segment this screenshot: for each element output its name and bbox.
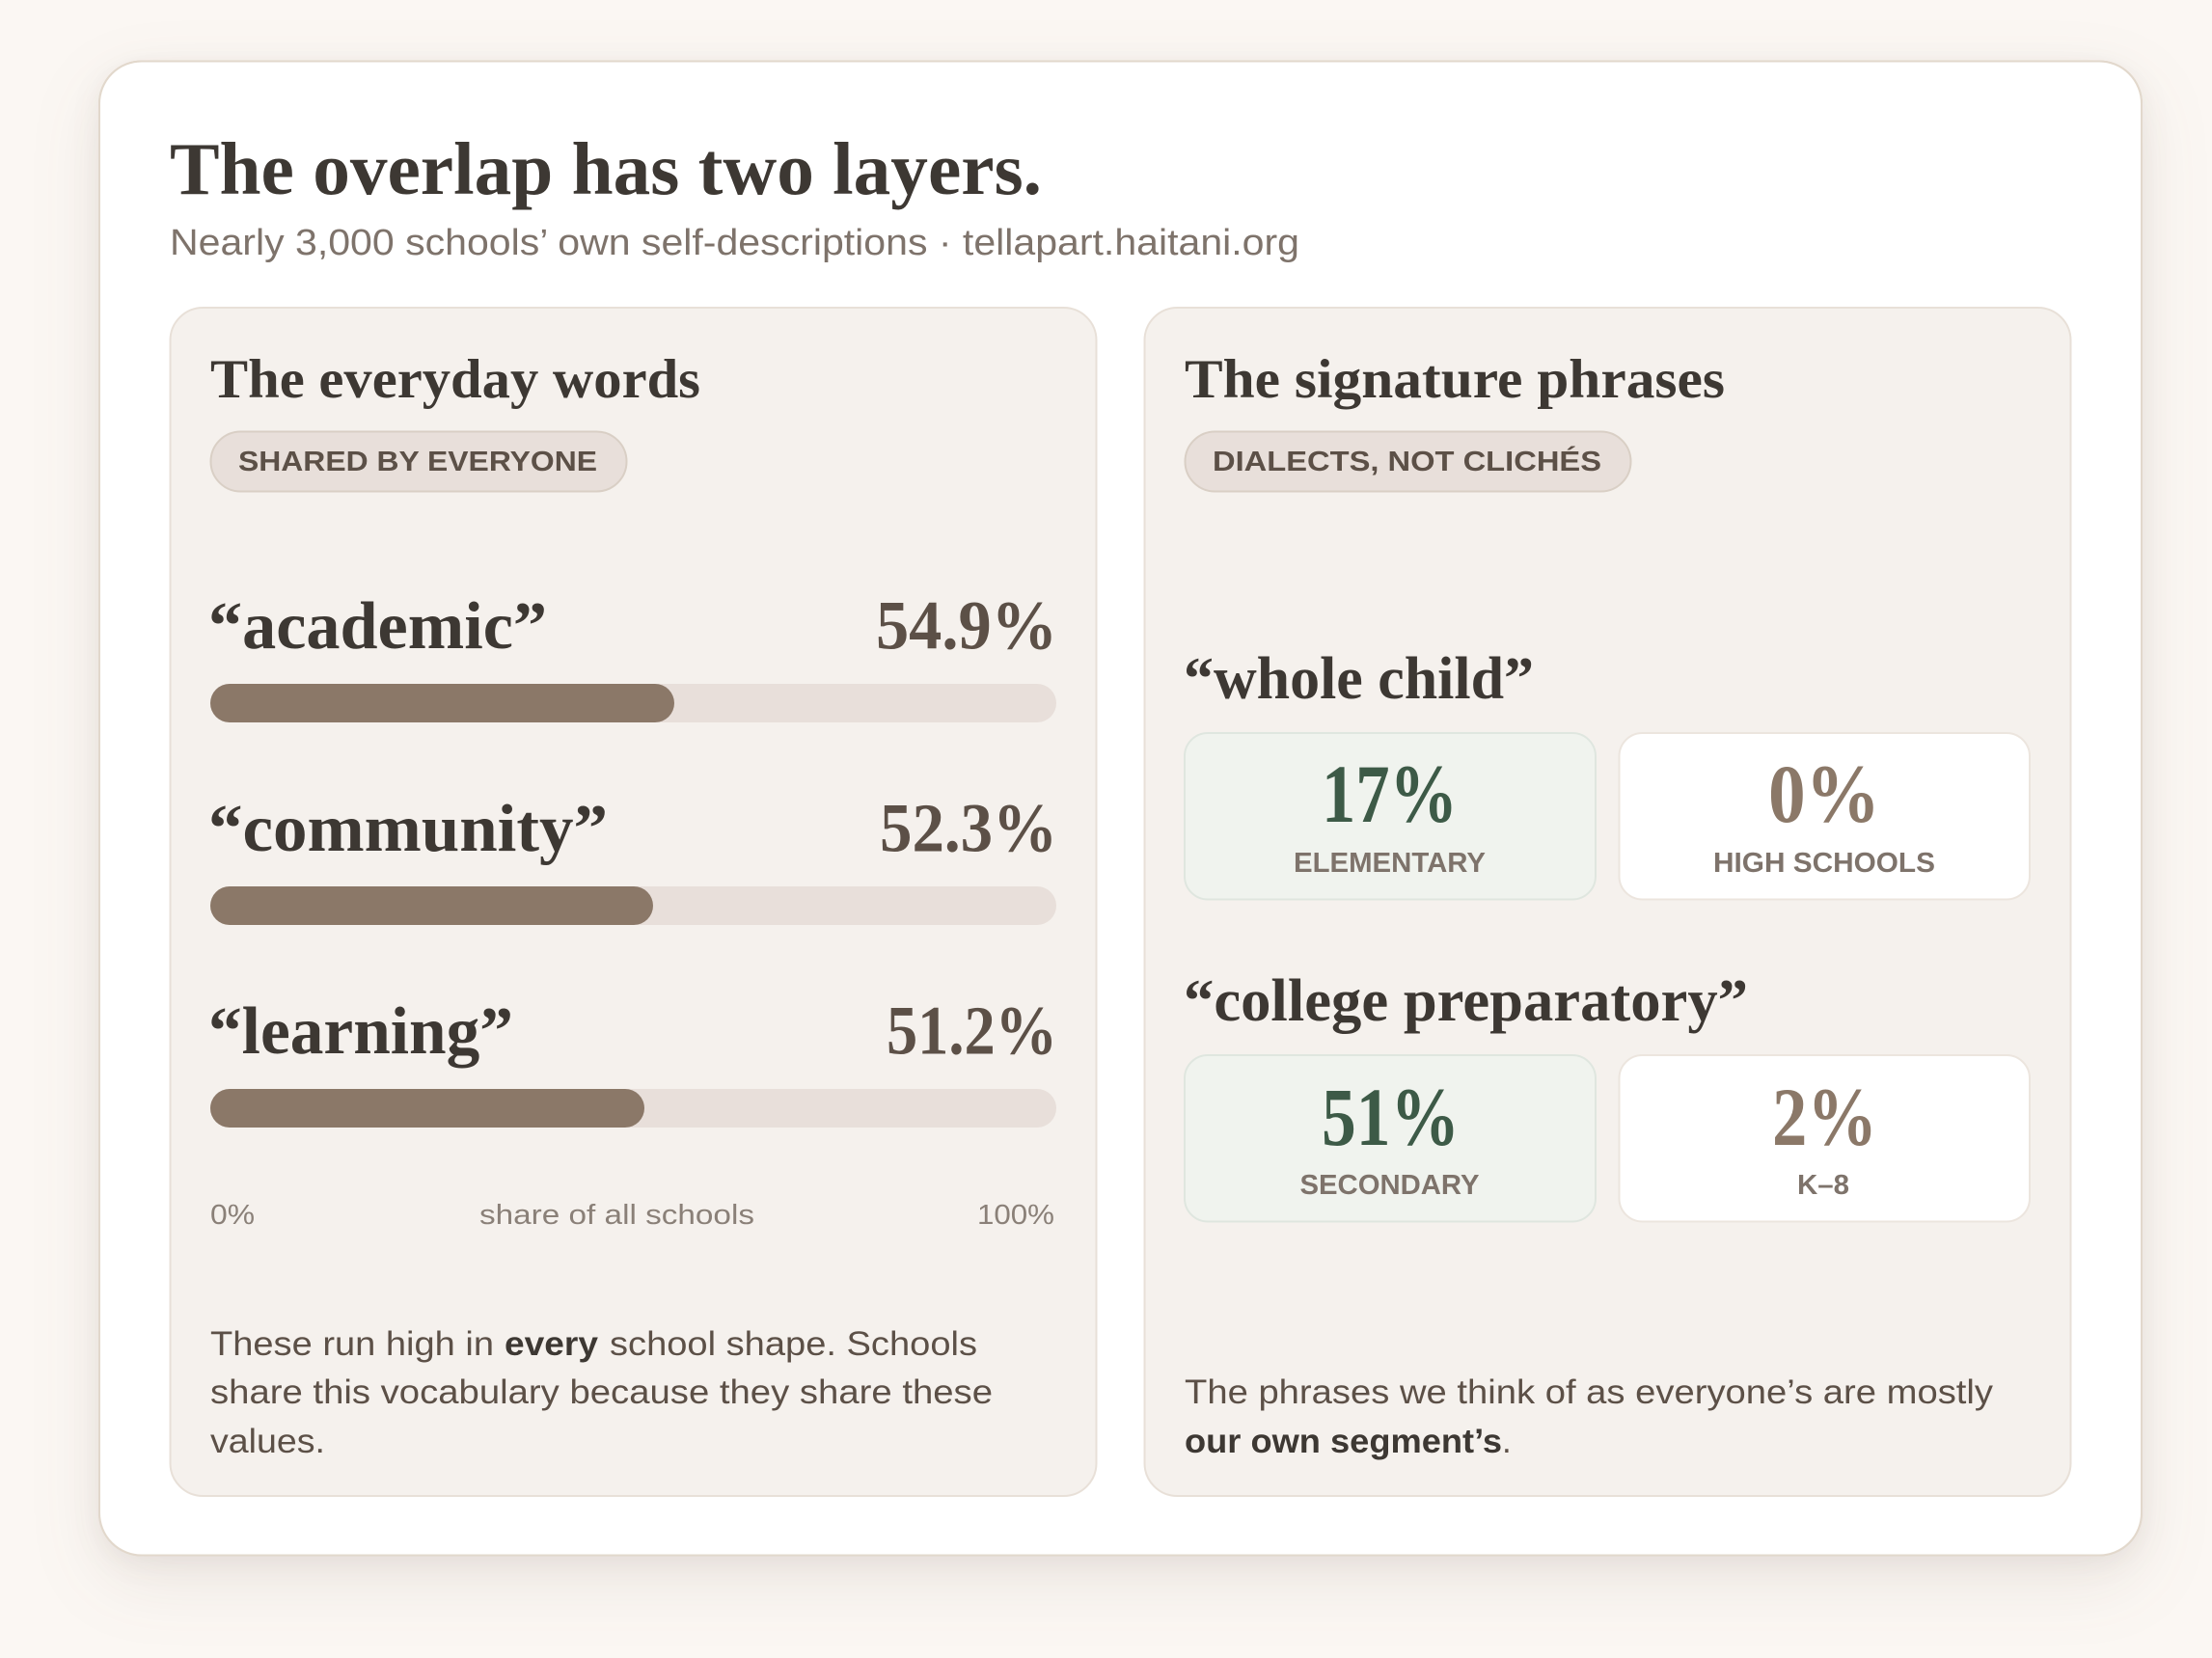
note: signature phrases	[1185, 1373, 1994, 1460]
title: The overlap has two layers.	[170, 127, 1042, 210]
panel: the signature phrases	[1144, 308, 2070, 1496]
row: learning	[208, 992, 1057, 1128]
panel heading: signature phrases: The signature phrases	[1185, 349, 1725, 410]
badge: dialects, not cliches	[1185, 432, 1630, 492]
row: community: “community”	[208, 792, 608, 866]
subtitle: Nearly 3,000 schools’ own self-descriptions · tellapart.haitani.org	[170, 223, 1299, 263]
row: learning: “learning”	[208, 994, 513, 1069]
row: learning: 51.2%	[887, 992, 1057, 1069]
note: everyday words: These run high in	[210, 1325, 494, 1363]
row: community: 52.3%	[880, 789, 1057, 866]
axis labels: share of all schools	[479, 1200, 754, 1231]
stat tile: 2% k-8: K–8	[1797, 1170, 1849, 1201]
axis labels	[210, 1200, 1054, 1231]
panel: the everyday words	[170, 308, 1096, 1496]
stat tile: 2% k-8: 2%	[1772, 1071, 1877, 1163]
badge: dialects, not cliches: DIALECTS, NOT CLICHÉS	[1213, 445, 1601, 477]
stat tile: 0% high schools	[1619, 733, 2030, 899]
stat tile: 17% elementary: 17%	[1322, 747, 1458, 840]
phrase: whole child: “whole child”	[1184, 646, 1534, 712]
note: signature phrases: The phrases we think of as everyone’s are mostly	[1185, 1373, 1994, 1411]
stat tile: 51% secondary: 51%	[1322, 1071, 1460, 1163]
stat tile: 2% k-8	[1619, 1055, 2030, 1221]
panel heading: everyday words: The everyday words	[210, 349, 700, 410]
stat tile: 0% high schools: 0%	[1768, 747, 1880, 840]
note: everyday words	[210, 1325, 993, 1460]
badge: shared by everyone	[210, 432, 627, 492]
note: everyday words: share this vocabulary because they share these	[210, 1373, 993, 1411]
stat tile: 51% secondary	[1185, 1055, 1596, 1221]
note: signature phrases: .	[1502, 1423, 1512, 1460]
note: signature phrases: our own segment’s	[1185, 1423, 1502, 1460]
row: academic: 54.9%	[876, 586, 1057, 664]
note: everyday words: values.	[210, 1423, 325, 1460]
row: academic	[208, 586, 1057, 722]
note: everyday words: school shape. Schools	[610, 1325, 977, 1363]
stat tile: 17% elementary	[1185, 733, 1596, 899]
axis labels: 100%	[977, 1200, 1054, 1231]
stat tile: 0% high schools: HIGH SCHOOLS	[1713, 848, 1935, 879]
axis labels: 0%	[210, 1200, 255, 1231]
stat tile: 17% elementary: ELEMENTARY	[1294, 848, 1486, 879]
row: community	[208, 789, 1057, 925]
badge: shared by everyone: SHARED BY EVERYONE	[238, 447, 597, 477]
note: everyday words: every	[505, 1325, 599, 1363]
stat tile: 51% secondary: SECONDARY	[1300, 1170, 1480, 1201]
row: academic: “academic”	[208, 589, 547, 664]
phrase: college preparatory: “college preparatory”	[1184, 968, 1748, 1034]
